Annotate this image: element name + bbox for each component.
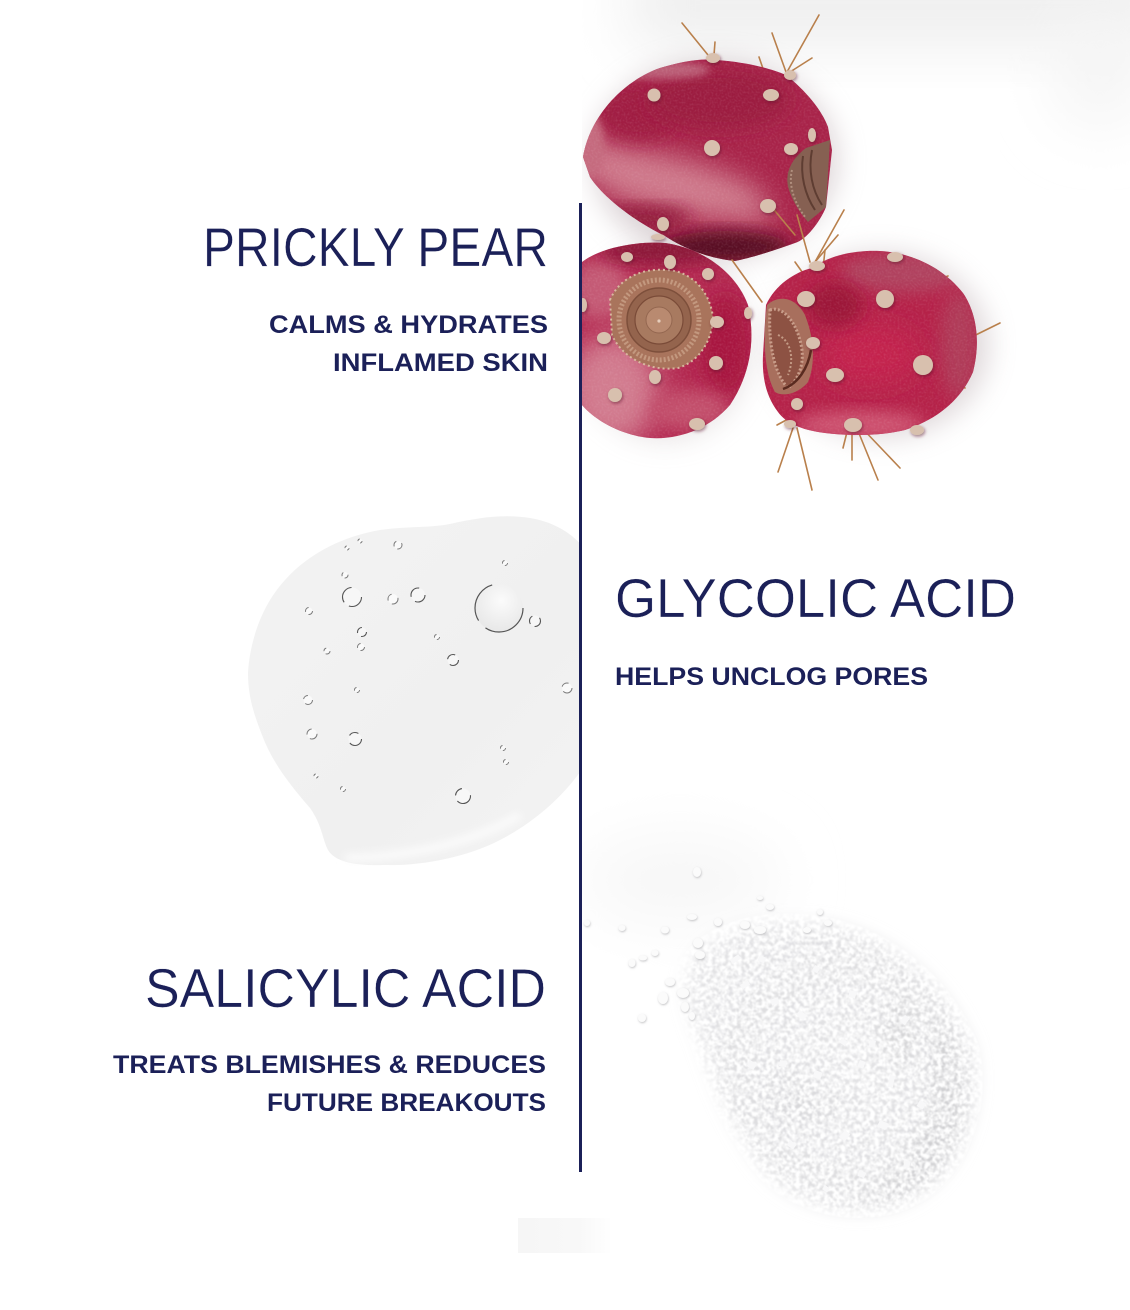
background — [518, 0, 1130, 1253]
areoles — [579, 53, 933, 435]
heading: SALICYLIC ACID — [145, 957, 546, 1019]
description: HELPS UNCLOG PORES — [615, 663, 928, 691]
heading: GLYCOLIC ACID — [615, 567, 1016, 629]
description — [113, 1051, 546, 1117]
scar: top fruit — [787, 140, 830, 222]
description — [269, 311, 548, 377]
gel body — [248, 516, 585, 865]
fruit shadows — [580, 60, 988, 440]
ingredient: glycolic acid — [615, 567, 1016, 691]
divider line — [579, 203, 582, 1172]
salt crystals — [730, 954, 926, 1193]
description: INFLAMED SKIN — [333, 349, 548, 377]
scar: lower fruit concentric — [610, 270, 713, 369]
description: CALMS & HYDRATES — [269, 311, 548, 339]
gel highlight — [345, 815, 520, 858]
fruit: lower left — [582, 242, 752, 438]
description: FUTURE BREAKOUTS — [267, 1089, 546, 1117]
fruit: lower right — [762, 250, 977, 435]
description: TREATS BLEMISHES & REDUCES — [113, 1051, 546, 1079]
salt mound — [686, 922, 976, 1212]
scar: right fruit — [765, 299, 813, 394]
image: salt crystals — [584, 867, 983, 1218]
spines: top fruit — [681, 14, 820, 72]
salt texture — [675, 913, 983, 1218]
image: clear gel drop — [248, 516, 585, 865]
fruit: top — [583, 60, 832, 261]
image: prickly pears — [564, 15, 1000, 490]
ingredient: salicylic acid — [113, 957, 546, 1117]
bubbles — [304, 539, 572, 804]
salt shadow — [888, 1042, 961, 1198]
heading: PRICKLY PEAR — [203, 216, 548, 278]
ingredient: prickly pear — [203, 216, 548, 377]
salt grains — [584, 867, 832, 1022]
spines: lower fruits — [732, 205, 1000, 490]
